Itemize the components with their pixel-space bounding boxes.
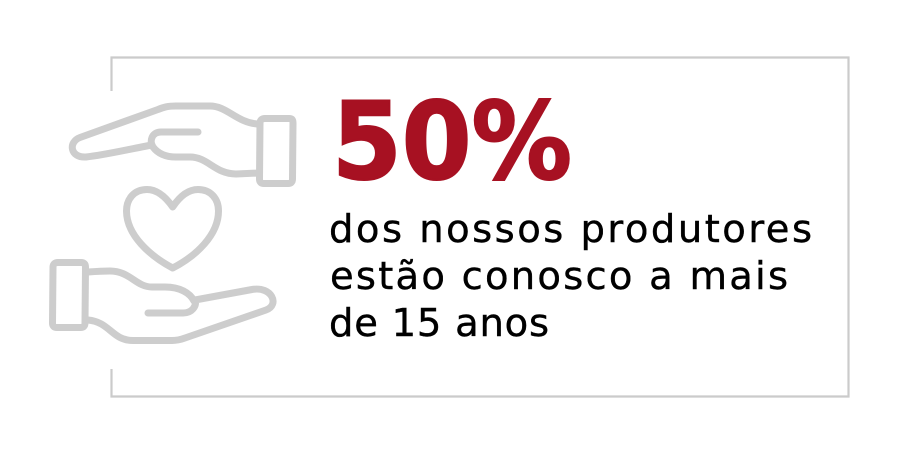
text line 3: de 15 anos <box>329 301 549 346</box>
frame with gap on the left side <box>112 58 848 396</box>
icon: hands protecting a heart <box>52 106 293 340</box>
icon: upper hand <box>72 106 293 184</box>
text line 2: estão conosco a mais <box>330 254 788 299</box>
icon: lower hand <box>52 262 273 340</box>
icon: heart <box>126 190 218 268</box>
heading: 50%: 50% <box>332 80 572 204</box>
text line 1: dos nossos produtores <box>329 207 812 252</box>
text block: description <box>329 207 812 346</box>
